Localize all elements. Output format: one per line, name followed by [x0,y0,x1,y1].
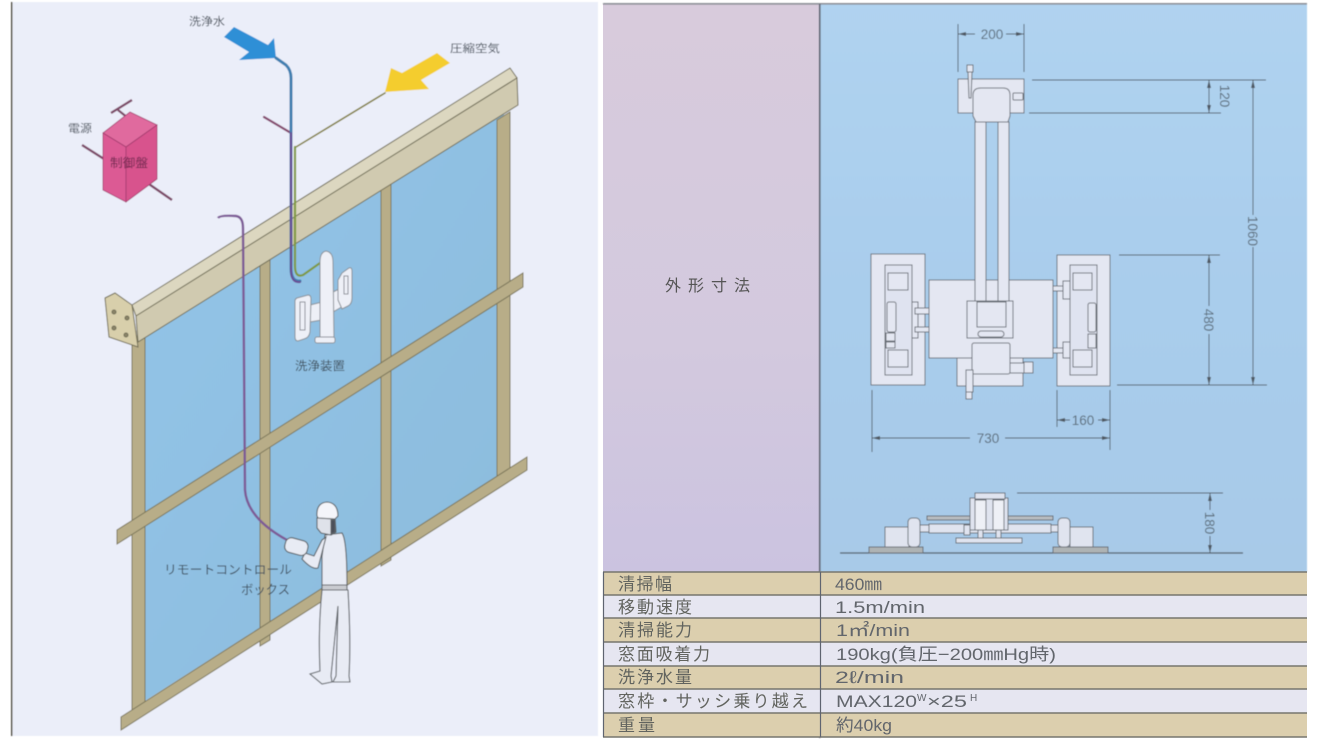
table row backgrounds [603,572,1307,737]
label: wash water: 洗浄水 [189,14,225,28]
cleaning unit [295,251,352,343]
window glass [140,108,504,704]
pipes to cleaning unit [264,58,385,282]
label: cleaning unit: 洗浄装置 [295,359,345,373]
row: frame crossing: W [917,693,927,704]
row: suction force [618,645,1056,664]
row: cleaning capacity: 清掃能力 [618,621,692,640]
top view drawing [871,65,1110,399]
row: water volume: 2ℓ/min [835,668,904,687]
row: cleaning capacity: 1㎡/min [836,621,910,640]
control panel box: 制御盤 [110,155,148,170]
row: frame crossing: ×25 [927,692,967,711]
side view drawing [869,493,1108,553]
dimension values: 160 [1072,413,1094,428]
dimension values: 180 [1202,512,1217,534]
label: remote control box: リモートコントロール [164,563,292,577]
row: cleaning width: 460㎜ [835,575,882,594]
row: travel speed [618,598,925,617]
dimension values: 120 [1217,85,1232,107]
row: frame crossing [618,692,977,711]
top beam [105,68,518,347]
panel: spec sheet [603,3,1307,738]
specification table [603,572,1307,737]
row: weight: 重量 [618,716,655,735]
row: suction force: 190kg(負圧−200㎜Hg時) [836,645,1056,664]
remote cable [218,216,287,540]
row: frame crossing: H [970,693,977,704]
row: frame crossing: MAX120 [836,692,917,711]
row: travel speed: 移動速度 [618,598,692,617]
row: frame crossing: 窓枠・サッシ乗り越え [618,692,808,711]
dimension values: 1060 [1245,216,1260,246]
arrow: wash water [224,27,276,60]
dimension values [977,27,1260,534]
dimension lines [840,24,1267,553]
row: suction force: 窓面吸着力 [618,645,710,664]
window frame [117,112,527,730]
dimensions label cell: 外形寸法 [665,277,750,295]
label: compressed air: 圧縮空気 [450,41,500,55]
worker [283,502,350,684]
row: weight [618,716,892,735]
row: cleaning width [618,575,882,594]
label: remote control box [164,563,292,597]
label: power: 電源 [68,121,92,135]
dimension drawing cell [603,3,1307,738]
row: water volume [618,668,904,687]
row: weight: 約40kg [836,716,892,735]
centre plate [929,280,1053,358]
control panel box [82,100,172,202]
dimensions label cell [603,4,820,572]
label: remote control box: ボックス [241,583,290,597]
panel: installation illustration [11,2,598,736]
left pad [871,254,925,385]
row: water volume: 洗浄水量 [618,668,692,687]
dimension values: 200 [981,27,1003,42]
row: travel speed: 1.5m/min [835,598,925,617]
arrow: compressed air [385,53,450,92]
dimension values: 730 [977,431,999,446]
row: cleaning width: 清掃幅 [618,575,672,594]
row: cleaning capacity [618,621,910,640]
dimension values: 480 [1201,309,1216,331]
right pad [1057,255,1110,386]
